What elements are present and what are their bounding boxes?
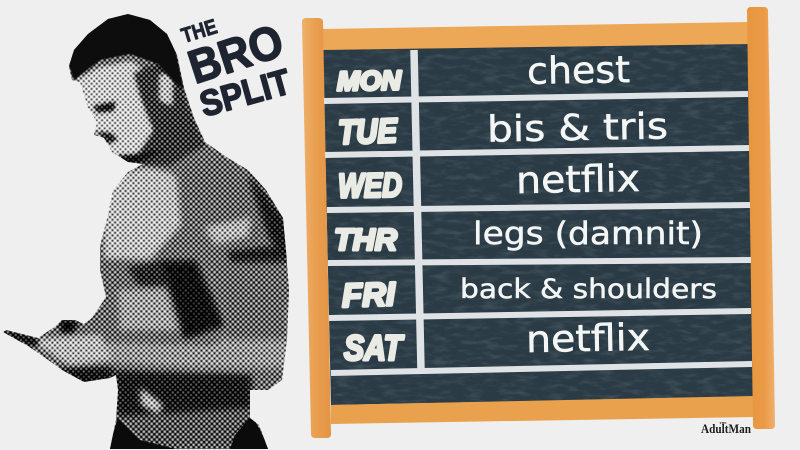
chalk grid lines — [324, 50, 752, 373]
netflix: netflix — [516, 157, 640, 202]
Friday: FRI — [341, 275, 396, 314]
netflix: netflix — [526, 316, 650, 361]
title word: THE: THE — [179, 15, 220, 48]
legs (damnit): legs (damnit) — [473, 216, 703, 252]
hair — [69, 14, 184, 90]
title: The Bro Split — [179, 13, 295, 125]
bis and tris: bis & tris — [487, 106, 668, 151]
logo: The Adult Man: THE — [719, 421, 727, 425]
Thursday: THR — [334, 222, 398, 257]
Wednesday: WED — [338, 166, 402, 206]
chest: chest — [527, 48, 630, 93]
logo: The Adult Man: AdultMan — [701, 421, 752, 436]
Saturday: SAT — [344, 329, 404, 368]
title word: SPLIT: SPLIT — [195, 61, 295, 125]
board surface — [323, 43, 753, 405]
workouts — [460, 48, 717, 361]
Monday: MON — [337, 65, 402, 97]
back and shoulders: back & shoulders — [460, 274, 717, 305]
title word: BRO: BRO — [182, 13, 289, 94]
wooden frame — [302, 7, 775, 438]
halftone man looking at phone — [0, 0, 300, 450]
chalkboard — [302, 7, 775, 438]
shorts — [108, 415, 270, 449]
Tuesday: TUE — [337, 112, 399, 152]
day labels — [334, 65, 404, 368]
